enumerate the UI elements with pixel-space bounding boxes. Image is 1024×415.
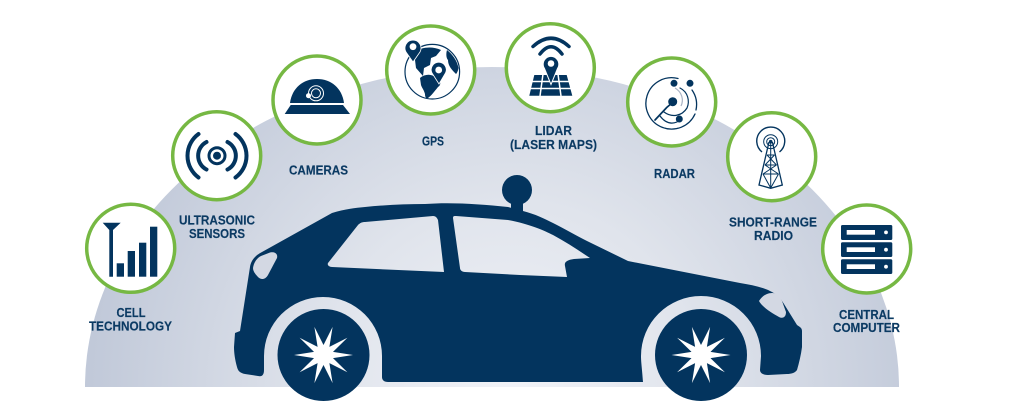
label: central computer: CENTRAL: [839, 308, 894, 322]
label: ultrasonic sensors: ULTRASONIC: [179, 214, 255, 228]
label: lidar (laser maps): (LASER MAPS): [510, 138, 597, 152]
front wheel: [655, 309, 747, 401]
rear wheel: [278, 309, 370, 401]
label: cell technology: TECHNOLOGY: [89, 320, 173, 334]
sensor: cell technology: [87, 204, 175, 334]
label: ultrasonic sensors: [179, 214, 255, 241]
rear light: [253, 252, 277, 279]
label: short-range radio: SHORT-RANGE: [729, 216, 817, 230]
front light: [759, 293, 786, 318]
background dome: [85, 67, 899, 387]
label: lidar (laser maps): LIDAR: [535, 124, 572, 138]
label: central computer: [833, 308, 900, 335]
label: short-range radio: RADIO: [754, 229, 793, 243]
icon: antenna and signal bars: [103, 223, 157, 277]
roof sensor: [502, 175, 532, 212]
icon: radio tower: [757, 127, 785, 188]
icon: server rack: [841, 225, 892, 274]
sensor: ultrasonic sensors: [173, 112, 261, 241]
rear window: [328, 216, 444, 272]
sensor: short-range radio: [728, 113, 817, 243]
icon: globe with pins: [405, 40, 460, 99]
label: cell technology: CELL: [116, 306, 146, 320]
car silhouette: [234, 175, 802, 382]
front window: [453, 216, 590, 277]
car body: [234, 203, 802, 382]
sensor: central computer: [823, 205, 911, 335]
sensor: lidar: [506, 24, 597, 152]
label: lidar (laser maps): [510, 124, 597, 152]
icon: wifi pin over map: [529, 38, 573, 96]
label: cell technology: [89, 306, 173, 334]
icon: ultrasonic waves: [187, 134, 247, 178]
icon: radar screen: [646, 78, 697, 129]
sensor: radar: [628, 58, 716, 181]
label: central computer: COMPUTER: [833, 321, 900, 335]
label: ultrasonic sensors: SENSORS: [189, 227, 245, 241]
icon: dome camera: [285, 79, 350, 114]
sensor: GPS: [387, 26, 475, 149]
label: radar: RADAR: [654, 167, 695, 181]
label: cameras: CAMERAS: [289, 163, 348, 177]
sensor: cameras: [273, 56, 361, 177]
label: GPS: GPS: [422, 135, 444, 149]
label: short-range radio: [729, 216, 817, 243]
